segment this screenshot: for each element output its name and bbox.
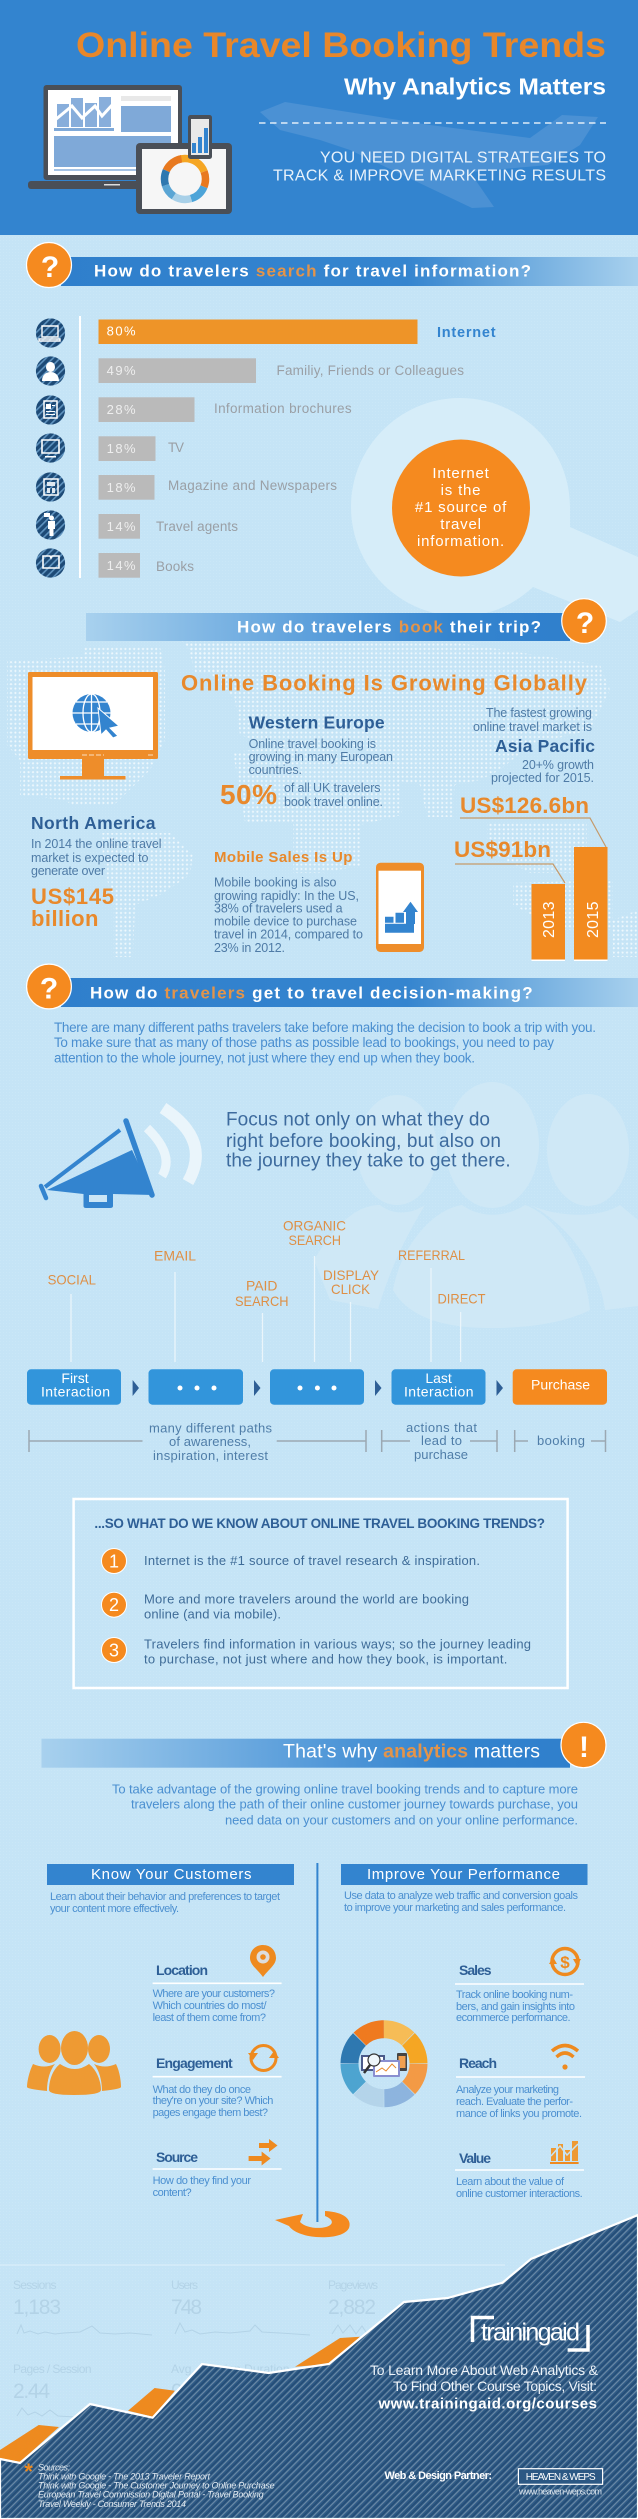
panel: faded analytics dashboard: 00:02:41 — [171, 2380, 253, 2403]
takeaway 1 — [102, 1548, 480, 1574]
item: engagement — [153, 2046, 282, 2119]
stage: last interaction — [392, 1369, 486, 1405]
call to action text: www.trainingaid.org/courses — [378, 2396, 597, 2413]
bar chart: asia pacific market — [454, 793, 608, 961]
bar: travel agents — [98, 514, 238, 539]
chart: rising footer area — [0, 2215, 638, 2519]
journey phase labels: lead to — [421, 1433, 462, 1448]
text block: analytics intro — [112, 1781, 578, 1827]
icon: question mark circle: ? — [40, 972, 58, 1006]
text block: mobile sales: Mobile Sales Is Up — [214, 849, 352, 866]
item: engagement: Engagement — [156, 2055, 233, 2071]
subtitle: Why Analytics Matters — [344, 74, 606, 100]
panel: faded analytics dashboard — [13, 2278, 390, 2417]
bar: TV: TV — [168, 440, 184, 455]
bar chart: information sources — [36, 318, 496, 578]
takeaway 2: online (and via mobile). — [144, 1606, 281, 1621]
journey touchpoint labels: PAID — [246, 1278, 278, 1294]
panel: key takeaways box — [74, 1499, 568, 1688]
journey touchpoint labels: DIRECT — [438, 1290, 486, 1306]
stage: last interaction: Interaction — [404, 1384, 474, 1400]
arrow — [133, 1380, 139, 1396]
icon: source arrows — [249, 2139, 278, 2166]
journey phase labels: inspiration, interest — [153, 1448, 268, 1463]
stage: first interaction: First — [61, 1370, 89, 1386]
stage: middle touchpoints — [270, 1369, 364, 1405]
panel: header — [0, 0, 638, 235]
icon: exclamation circle — [561, 1722, 606, 1768]
text block: mobile sales: growing rapidly: In the US, — [214, 889, 359, 903]
callout text: is the — [441, 482, 481, 499]
text block: mobile sales: Mobile booking is also — [214, 876, 337, 890]
text block: asia pacific: Asia Pacific — [495, 736, 595, 756]
icon: curved arrow — [275, 2211, 350, 2237]
bar: brochures: 28% — [107, 402, 136, 417]
text block: north america: billion — [31, 906, 98, 931]
stage: first interaction — [27, 1369, 121, 1405]
panel: faded analytics dashboard: 748 — [171, 2296, 202, 2319]
item: source: content? — [153, 2187, 192, 2199]
takeaway 3: 3 — [109, 1640, 119, 1660]
column heading: Improve Your Performance — [367, 1866, 560, 1883]
panel: improve your performance — [341, 1864, 588, 2200]
sources: Travel Weekly - Consumer Trends 2014 — [38, 2499, 186, 2509]
arrow — [375, 1380, 382, 1396]
panel: faded analytics dashboard: 1,183 — [13, 2296, 61, 2319]
text block: focus statement — [226, 1110, 511, 1172]
column intro: Use data to analyze web traffic and conversion goals — [344, 1890, 578, 1902]
icon: location pin — [250, 1945, 276, 1977]
journey phase labels — [149, 1420, 585, 1463]
orange ribbons — [0, 2337, 360, 2462]
item: location — [153, 1945, 282, 2024]
callout text: travel — [440, 516, 482, 533]
bar: brochures: Information brochures — [214, 401, 352, 416]
item: value — [455, 2141, 584, 2200]
item: reach: mance of links you promote. — [456, 2108, 582, 2120]
item: reach: Analyze your marketing — [456, 2084, 559, 2096]
section heading: That's why analytics matters — [283, 1741, 540, 1763]
sources: European Travel Commission Digital Portal - Travel Booking — [38, 2490, 264, 2500]
callout text: #1 source of — [415, 499, 507, 516]
callout text — [415, 465, 507, 550]
item: engagement: they're on your site? Which — [153, 2095, 273, 2107]
text block: focus statement: the journey they take to get there. — [226, 1151, 511, 1172]
takeaway 2 — [102, 1591, 469, 1621]
text block: western europe: book travel online. — [284, 795, 383, 809]
column intro — [50, 1891, 280, 1915]
text block: western europe: Online travel booking is — [249, 737, 376, 751]
callout text: Internet — [432, 465, 490, 482]
bar: TV — [98, 436, 184, 461]
stage: purchase: Purchase — [531, 1377, 590, 1393]
panel: booking section band — [86, 599, 606, 643]
text block: western europe: countries. — [249, 763, 302, 777]
section heading: How do travelers search for travel information? — [94, 262, 531, 281]
journey phase labels: many different paths — [149, 1421, 272, 1436]
item: reach: Reach — [459, 2055, 497, 2071]
bar chart: asia pacific market: 2013 — [541, 901, 558, 938]
column intro: your content more effectively. — [50, 1903, 179, 1915]
icon column — [36, 318, 65, 578]
item: value: Value — [459, 2150, 491, 2166]
bar: books: Books — [156, 559, 194, 574]
icon: monitor with globe and cursor — [28, 672, 158, 780]
journey touchpoint labels: SEARCH — [288, 1232, 341, 1248]
text block: asia pacific: online travel market is — [473, 720, 592, 734]
journey touchpoint labels: DISPLAY — [323, 1267, 380, 1283]
panel: search section band — [26, 242, 638, 288]
stage: middle touchpoints — [148, 1369, 243, 1405]
icon: question mark circle — [27, 964, 71, 1009]
header tagline: YOU NEED DIGITAL STRATEGIES TO — [320, 149, 606, 166]
icon: question mark circle: ? — [576, 607, 594, 640]
chart: performance donut — [350, 2029, 418, 2098]
text block: mobile sales — [214, 849, 363, 955]
bar: internet: 80% — [107, 324, 136, 339]
icon: analytics devices — [361, 2053, 407, 2077]
call to action text — [370, 2362, 599, 2413]
bar chart: asia pacific market: US$126.6bn — [460, 793, 589, 818]
panel: faded analytics dashboard: 2.44 — [13, 2380, 50, 2403]
design partner — [384, 2469, 603, 2497]
panel: faded analytics dashboard: 2,882 — [328, 2296, 376, 2319]
flow: journey stages — [27, 1369, 607, 1405]
text block: western europe — [220, 713, 393, 810]
panel: know your customers — [27, 1864, 294, 2199]
text block: focus statement: right before booking, but also on — [226, 1131, 501, 1152]
call to action text: To Learn More About Web Analytics & — [370, 2362, 599, 2378]
journey touchpoint labels: SOCIAL — [48, 1272, 96, 1288]
text block: western europe: of all UK travelers — [284, 781, 380, 795]
bar: brochures — [98, 397, 352, 422]
icon: mobile phone — [376, 863, 424, 952]
section heading: How do travelers book their trip? — [237, 618, 541, 637]
journey touchpoint labels — [48, 1218, 486, 1309]
section heading: How do travelers get to travel decision-making? — [90, 984, 533, 1003]
arrow — [496, 1380, 503, 1396]
journey touchpoint labels: EMAIL — [154, 1248, 196, 1264]
stage: purchase — [513, 1369, 607, 1405]
logo: trainingaid: trainingaid — [481, 2319, 580, 2347]
text block: asia pacific: The fastest growing — [486, 706, 592, 720]
bar: books — [98, 553, 194, 578]
icon: sales cycle: $ — [560, 1953, 570, 1972]
text block: north america: US$145 — [31, 884, 114, 909]
text block: intro paragraph: To make sure that as many of those paths as possible lead to bookings, you need to pay — [54, 1035, 554, 1050]
takeaway 3: Travelers find information in various ways; so the journey leading — [144, 1636, 531, 1651]
text block: asia pacific: projected for 2015. — [491, 771, 594, 785]
text block: asia pacific: 20+% growth — [522, 758, 594, 772]
text block: mobile sales: 23% in 2012. — [214, 941, 285, 955]
text block: asia pacific — [473, 706, 595, 785]
design partner: Web & Design Partner: — [384, 2470, 492, 2482]
icon: wifi — [552, 2046, 578, 2070]
item: source — [153, 2139, 282, 2199]
text block: mobile sales: 38% of travelers used a — [214, 902, 343, 916]
text block: analytics intro: need data on your customers and on your online performance. — [225, 1812, 578, 1827]
stage: first interaction: Interaction — [41, 1384, 110, 1400]
panel: faded analytics dashboard: Pages / Session — [13, 2362, 92, 2376]
takeaway 1: 1 — [109, 1552, 119, 1572]
bar: TV: 18% — [107, 441, 136, 456]
item: sales: Track online booking num- — [456, 1989, 573, 2001]
panel: faded analytics dashboard: Pageviews — [328, 2278, 378, 2292]
bar: travel agents: Travel agents — [156, 519, 238, 534]
journey touchpoint labels: SEARCH — [235, 1293, 288, 1309]
item: value: online customer interactions. — [456, 2188, 583, 2200]
item: source: Source — [156, 2149, 198, 2165]
takeaway 2: 2 — [109, 1595, 119, 1615]
bar: magazines: 18% — [107, 480, 136, 495]
bar: magazines — [98, 475, 337, 500]
callout text: information. — [417, 533, 505, 550]
takeaway 2: More and more travelers around the world are booking — [144, 1591, 469, 1606]
panel: faded analytics dashboard: Sessions — [13, 2278, 56, 2292]
bar: magazines: Magazine and Newspapers — [168, 478, 337, 493]
header tagline — [273, 149, 606, 184]
item: sales: ecommerce performance. — [456, 2012, 570, 2024]
item: sales — [455, 1948, 584, 2024]
item: source: How do they find your — [153, 2175, 251, 2187]
bar: family: Familiy, Friends or Colleagues — [276, 363, 464, 378]
icon: value chart — [550, 2141, 579, 2164]
text block: western europe: 50% — [220, 779, 277, 810]
arrow — [254, 1380, 260, 1396]
design partner: HEAVEN & WEPS — [526, 2472, 596, 2483]
item: engagement: What do they do once — [153, 2084, 251, 2096]
design partner: www.heaven-weps.com — [518, 2487, 602, 2497]
sources: Think with Google - The Customer Journey to Online Purchase — [38, 2481, 275, 2491]
bar: travel agents: 14% — [107, 519, 136, 534]
journey touchpoint labels: CLICK — [331, 1281, 371, 1297]
item: engagement: pages engage them best? — [153, 2107, 268, 2119]
bar: family — [98, 358, 464, 383]
call to action text: To Find Other Course Topics, Visit: — [393, 2378, 597, 2394]
column heading — [47, 1864, 294, 1885]
item: value: Learn about the value of — [456, 2176, 565, 2188]
journey touchpoint lines — [71, 1256, 461, 1362]
icon: question mark circle — [562, 599, 606, 643]
journey phase brackets — [29, 1430, 606, 1452]
column intro: to improve your marketing and sales performance. — [344, 1902, 566, 1914]
text block: analytics intro: travelers along the path of their online customer journey towards purchase, you — [131, 1796, 578, 1811]
icon: cycle arrows — [248, 2046, 279, 2070]
icon: question mark circle — [26, 242, 72, 288]
text block: intro paragraph — [54, 1020, 596, 1066]
text block: western europe: growing in many European — [249, 750, 393, 764]
item: reach — [456, 2046, 585, 2120]
heading: growing globally: Online Booking Is Growing Globally — [181, 671, 588, 696]
item: reach: reach. Evaluate the perfor- — [456, 2096, 573, 2108]
text block: western europe: Western Europe — [249, 713, 385, 733]
panel: faded analytics dashboard: Avg. Session Duration — [171, 2362, 290, 2376]
item: location: Location — [156, 1962, 208, 1978]
bar: family: 49% — [107, 363, 136, 378]
title: Online Travel Booking Trends — [76, 26, 606, 65]
icon: exclamation circle: ! — [579, 1731, 589, 1764]
text block: north america: In 2014 the online travel — [31, 837, 162, 851]
sources: Sources: — [38, 2463, 70, 2473]
icon: question mark circle: ? — [41, 251, 59, 284]
item: sales: bers, and gain insights into — [456, 2001, 575, 2013]
takeaway 1: Internet is the #1 source of travel research & inspiration. — [144, 1553, 480, 1568]
sources: Think with Google - The 2013 Traveler Report — [38, 2472, 210, 2482]
callout circle — [392, 440, 530, 576]
bar: books: 14% — [107, 558, 136, 573]
bar chart: asia pacific market: US$91bn — [454, 837, 551, 862]
text block: north america: generate over — [31, 864, 105, 878]
text block: analytics intro: To take advantage of the growing online travel booking trends and to capture more — [112, 1781, 578, 1796]
item: sales: Sales — [459, 1962, 492, 1978]
stage: last interaction: Last — [425, 1370, 452, 1386]
panel: magnifier with callout — [351, 398, 638, 622]
bar chart: asia pacific market: 2015 — [585, 901, 602, 938]
panel: analytics section band — [42, 1722, 606, 1768]
text block: mobile sales: mobile device to purchase — [214, 915, 357, 929]
icon: laptop, tablet and phone — [28, 85, 232, 214]
takeaway 3: to purchase, not just where and how they book, is important. — [144, 1651, 507, 1666]
column heading: Know Your Customers — [91, 1866, 252, 1883]
takeaway 3 — [102, 1636, 531, 1666]
panel: decision-making section band — [27, 964, 638, 1009]
box heading: ...SO WHAT DO WE KNOW ABOUT ONLINE TRAVEL BOOKING TRENDS? — [94, 1516, 545, 1531]
journey touchpoint labels: REFERRAL — [398, 1247, 465, 1263]
sources — [24, 2459, 275, 2509]
column intro — [344, 1890, 578, 1914]
world map dots — [7, 640, 638, 957]
header tagline: TRACK & IMPROVE MARKETING RESULTS — [273, 167, 606, 184]
icon: megaphone — [41, 1108, 196, 1208]
bar: internet — [98, 320, 496, 344]
item: location: least of them come from? — [153, 2012, 266, 2024]
column intro: Learn about their behavior and preferences to target — [50, 1891, 280, 1903]
bar: internet: Internet — [437, 325, 496, 341]
text block: intro paragraph: attention to the whole journey, not just where they end up when they book. — [54, 1051, 475, 1066]
text block: mobile sales: travel in 2014, compared to — [214, 928, 363, 942]
people silhouette background — [314, 1082, 638, 1328]
text block: north america — [31, 813, 162, 931]
column heading — [341, 1864, 588, 1885]
text block: intro paragraph: There are many different paths travelers take before making the decision to book a trip with you. — [54, 1020, 596, 1035]
panel: faded analytics dashboard: Users — [171, 2278, 198, 2292]
journey phase labels: purchase — [414, 1447, 468, 1462]
text block: north america: market is expected to — [31, 851, 149, 865]
item: location: Where are your customers? — [153, 1988, 275, 2000]
journey phase labels: of awareness, — [169, 1434, 251, 1449]
plane silhouette — [260, 102, 598, 208]
icon: customers group — [27, 2031, 121, 2095]
text block: north america: North America — [31, 813, 156, 833]
journey phase labels: actions that — [406, 1420, 477, 1435]
journey phase labels: booking — [537, 1433, 585, 1448]
icon: asterisk: * — [24, 2459, 33, 2484]
item: location: Which countries do most/ — [153, 2000, 267, 2012]
journey touchpoint labels: ORGANIC — [283, 1218, 346, 1234]
text block: focus statement: Focus not only on what they do — [226, 1110, 490, 1131]
